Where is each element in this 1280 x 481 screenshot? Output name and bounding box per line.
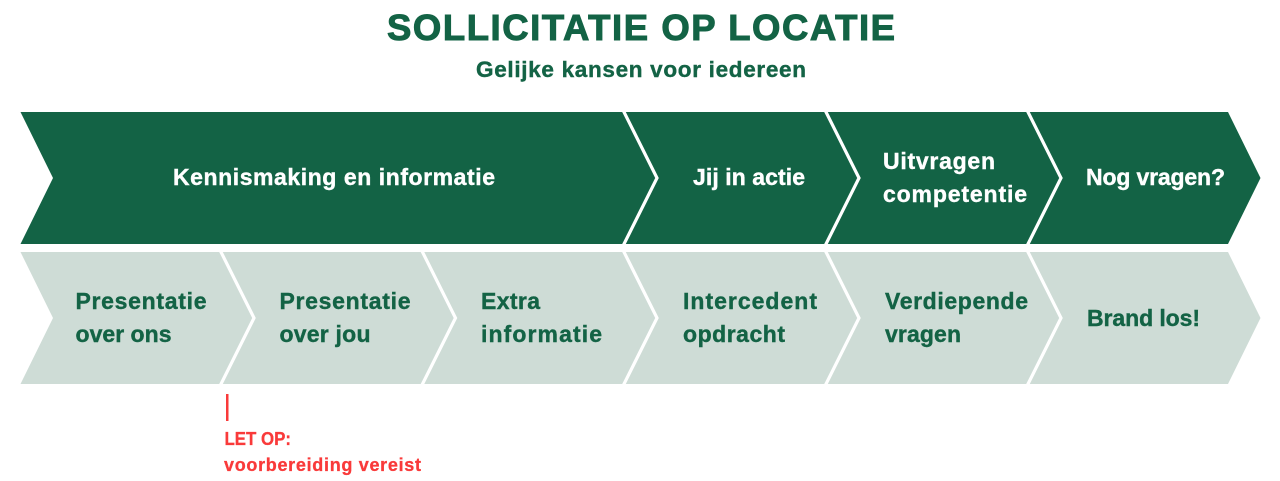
chevron: Presentatie over ons: Presentatie — [76, 288, 206, 314]
chevron: Nog vragen? — [1028, 112, 1260, 244]
callout: let op — [224, 394, 421, 475]
chevron: Intercedent opdracht — [624, 252, 859, 384]
chevron: Intercedent opdracht: Intercedent — [683, 288, 817, 314]
callout text: voorbereiding vereist: voorbereiding vereist — [224, 455, 421, 475]
chevron: Presentatie over ons — [20, 252, 254, 384]
chevron: Extra informatie: informatie — [481, 321, 602, 347]
chevron: Brand los! — [1028, 252, 1260, 384]
chevron: Jij in actie: Jij in actie — [693, 164, 805, 190]
chevron: Intercedent opdracht: opdracht — [683, 321, 785, 347]
title: SOLLICITATIE OP LOCATIE — [387, 7, 895, 48]
panel: steps row — [20, 250, 1260, 386]
callout text: LET OP: LET OP: — [224, 429, 291, 449]
chevron: Presentatie over jou: Presentatie — [280, 288, 410, 314]
chevron: Nog vragen?: Nog vragen? — [1086, 164, 1225, 190]
chevron: Extra informatie — [422, 252, 657, 384]
chevron: Verdiepende vragen — [826, 252, 1061, 384]
chevron: Jij in actie — [624, 112, 859, 244]
chevron: Presentatie over ons: over ons — [76, 321, 172, 347]
chevron: Uitvragen competentie: Uitvragen — [883, 148, 995, 174]
panel: phases row — [20, 110, 1260, 246]
chevron: Verdiepende vragen: vragen — [885, 321, 961, 347]
chevron: Brand los!: Brand los! — [1087, 305, 1200, 331]
chevron: Uitvragen competentie: competentie — [883, 181, 1027, 207]
chevron: Verdiepende vragen: Verdiepende — [885, 288, 1028, 314]
callout marker line — [226, 394, 228, 421]
chevron: Uitvragen competentie — [826, 112, 1061, 244]
chevron: Extra informatie: Extra — [481, 288, 540, 314]
chevron: Kennismaking en informatie: Kennismaking en informatie — [173, 164, 495, 190]
chevron: Presentatie over jou — [221, 252, 456, 384]
chevron: Presentatie over jou: over jou — [280, 321, 370, 347]
subtitle: Gelijke kansen voor iedereen — [476, 57, 806, 82]
chevron: Kennismaking en informatie — [20, 112, 657, 244]
